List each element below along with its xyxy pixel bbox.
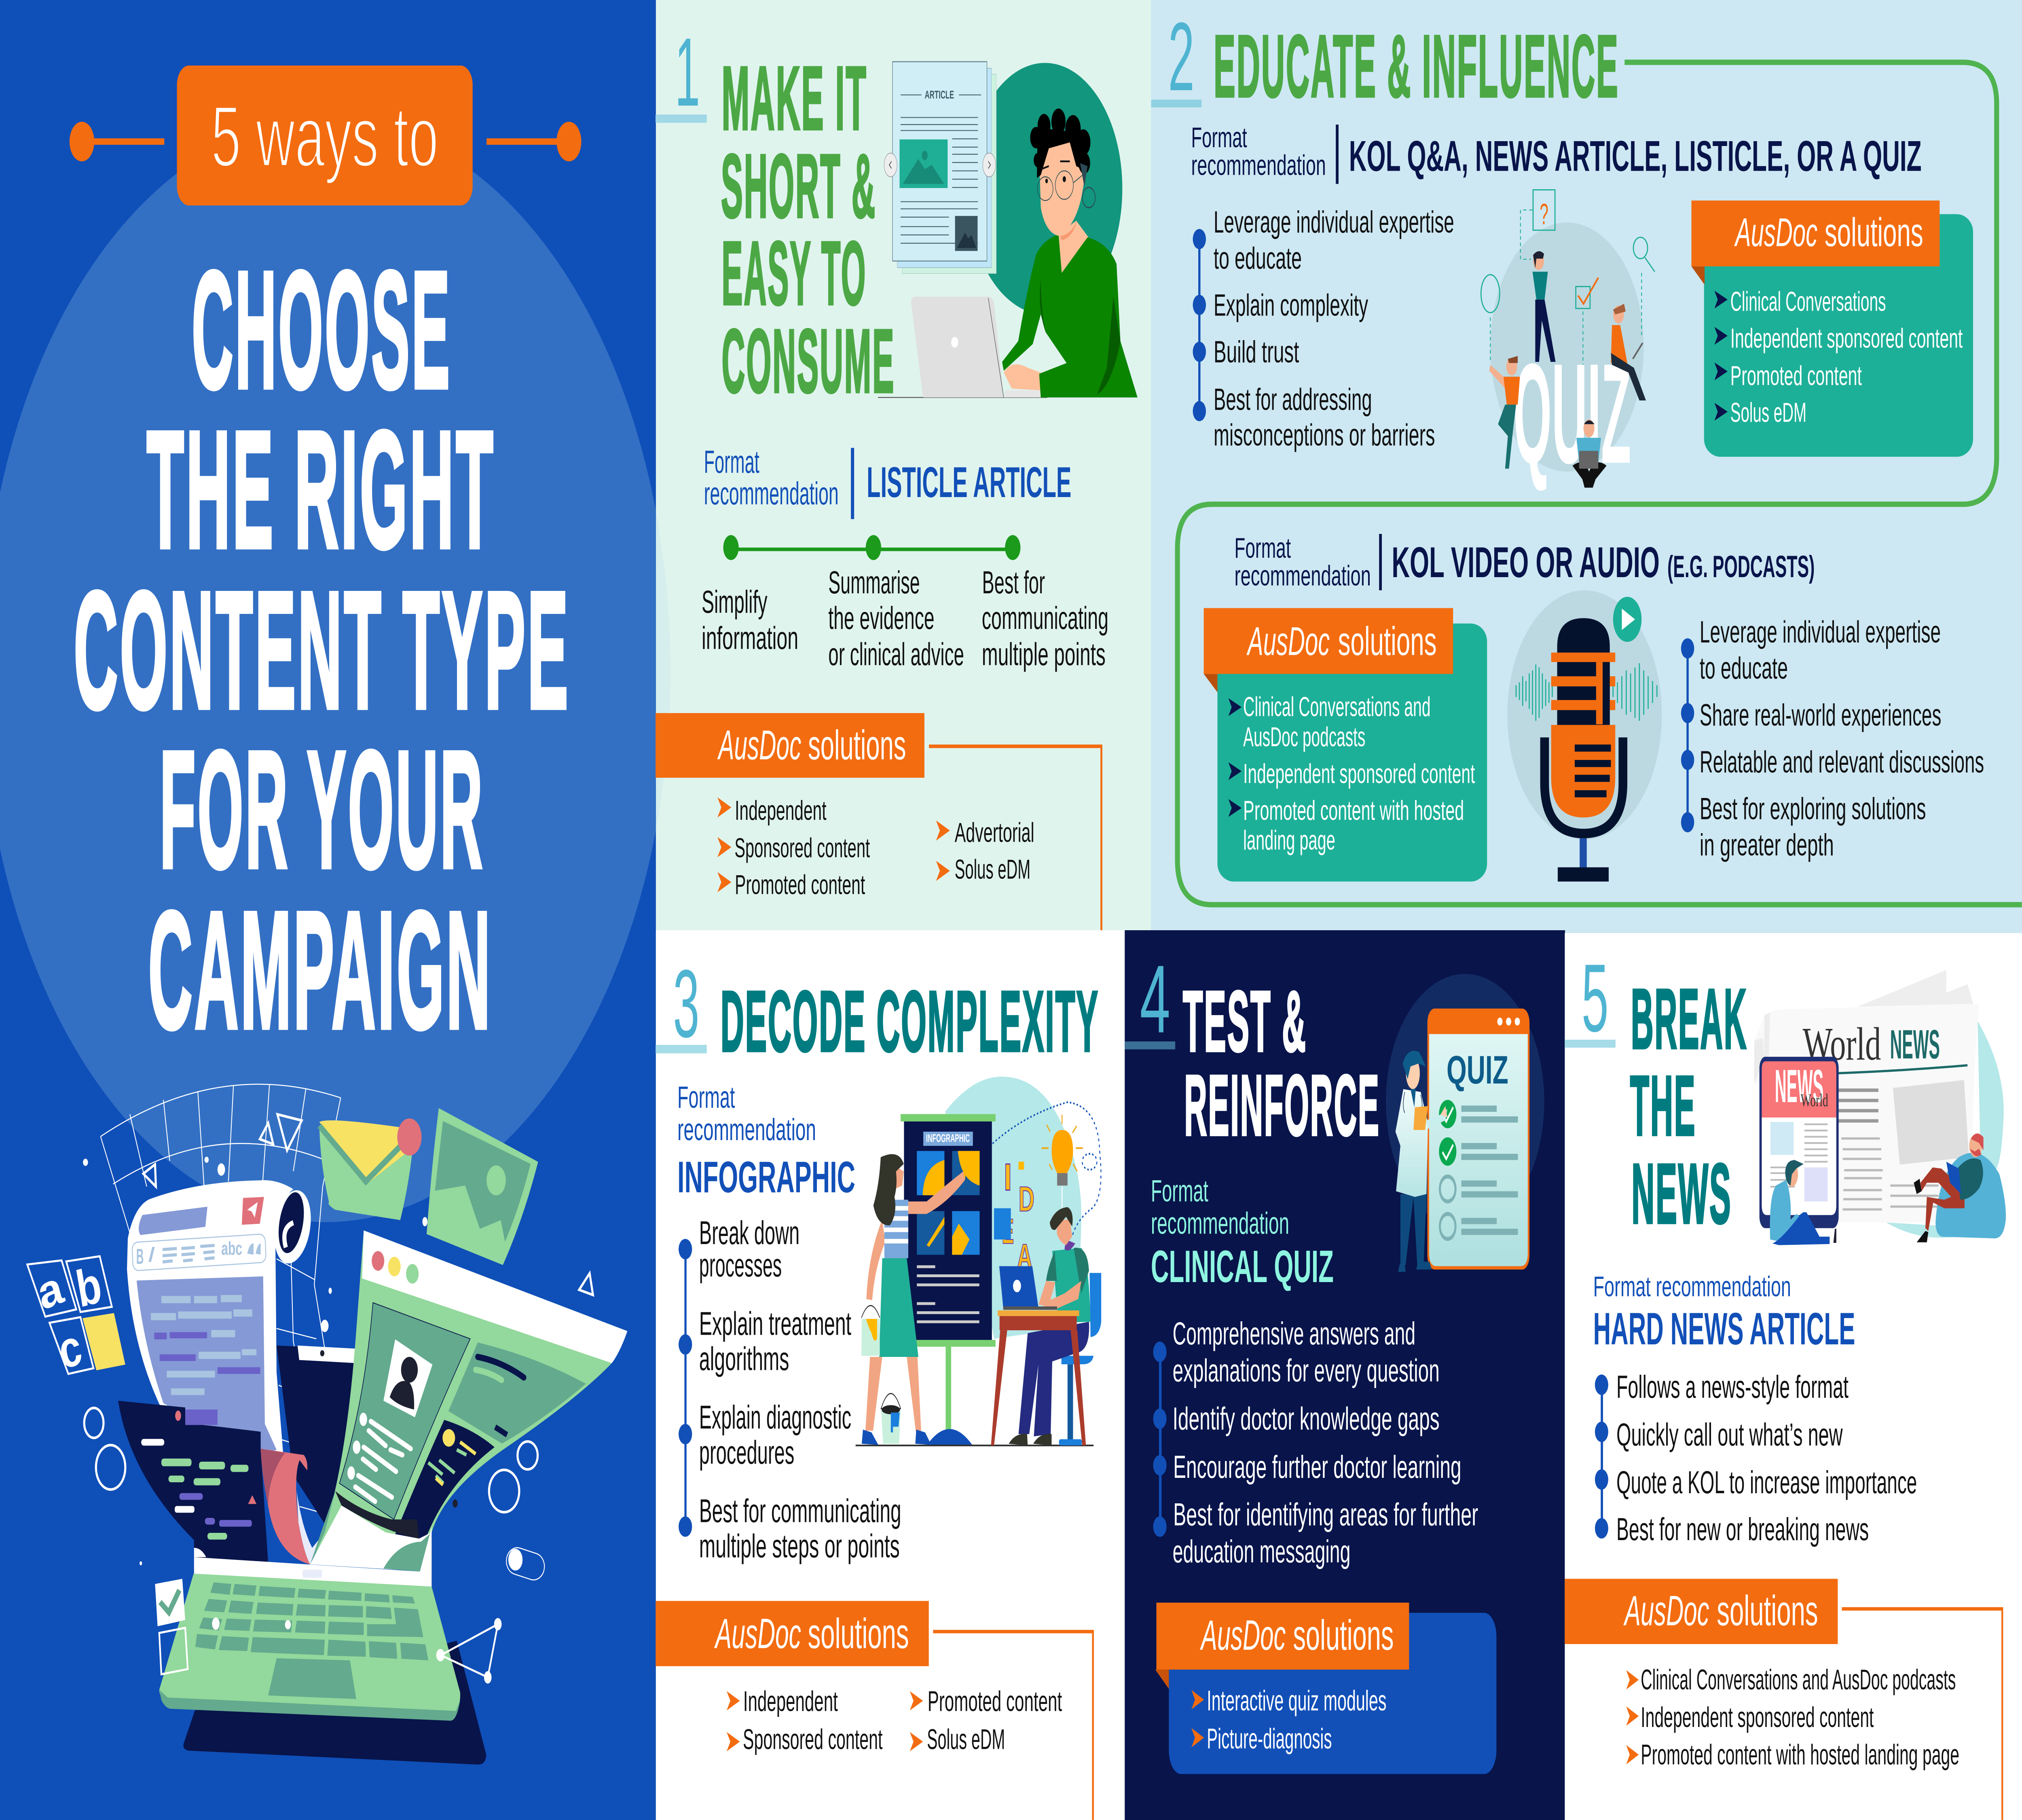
illustration: quiz people [1481,190,1655,493]
panel background: left title [0,0,656,1820]
heading [721,49,895,412]
illustration: newspaper and readers: NEWS [1890,1021,1940,1067]
solutions list: Solus eDM [927,1723,1005,1755]
timeline labels: Simplify [702,584,768,620]
format recommendation [704,444,839,511]
checkbox [155,1579,185,1626]
bullet text: Comprehensive answers and [1173,1316,1415,1352]
pill text: 5 ways to [211,88,438,185]
solutions box 2: AusDoc podcasts [1243,722,1365,752]
number rule [1565,1040,1616,1048]
shadow [183,1641,486,1765]
abc blocks [27,1256,112,1374]
panel: break the news [1565,945,2006,1820]
bullet text: Best for identifying areas for further [1173,1497,1478,1532]
solutions list: Independent sponsored content [1641,1701,1874,1733]
bullet text [1173,1316,1478,1570]
back screen [277,1346,355,1532]
bullet text: Explain diagnostic [699,1399,851,1435]
format recommendation: Format recommendation [1593,1271,1791,1302]
illustration: woman reading article [878,62,1138,398]
solutions list: Solus eDM [955,854,1030,885]
illustration: laptop with pages [27,1084,627,1765]
illustration: presenter and designer: A [1017,1238,1032,1275]
illustration: laptop with pages: c [54,1318,86,1380]
illustration: quiz people: ? [1540,197,1548,231]
bullets 1 [1193,229,1206,421]
desk laptop [999,1266,1038,1308]
format name: HARD NEWS ARTICLE [1593,1303,1855,1354]
panel background: test and reinforce [1125,930,1565,1820]
panel: left title [0,66,656,1222]
man sitting front [1770,1180,1801,1242]
bullet text 1: Explain complexity [1214,288,1368,322]
laptop [194,1527,431,1588]
solutions box: Interactive quiz modules [1207,1685,1386,1716]
panel background: educate and influence [1151,0,2022,933]
timeline labels [702,564,1108,672]
number 3: 3 [673,950,700,1058]
light bulb [1051,1130,1073,1173]
bullet text 2: in greater depth [1700,828,1834,862]
tablet [1760,1057,1839,1228]
red curl [261,1449,310,1564]
envelope [319,1127,413,1220]
illustration: newspaper and readers: NEWS [1775,1060,1823,1112]
solutions list: Sponsored content [734,833,870,863]
scroll body [137,1276,277,1455]
bullet text 1: Build trust [1214,335,1299,369]
format recommendation [1151,1174,1289,1240]
format name: CLINICAL QUIZ [1151,1241,1334,1292]
AusDoc header [1565,1579,1838,1644]
number rule [656,114,707,123]
illustration: newspaper and readers: World [1801,1090,1828,1110]
image card [427,1108,538,1265]
main title: THE RIGHT [146,396,495,583]
solutions box 1 [1692,201,1973,457]
toolbar [132,1234,266,1271]
illustration: presenter and designer: D [1019,1179,1034,1219]
man on beanbag [1935,1153,2006,1238]
bullet text: Quickly call out what’s new [1616,1418,1843,1453]
format recommendation: Format [704,444,759,480]
toggle [504,1545,547,1583]
format recommendation 2 [1235,532,1371,592]
format name 2: KOL VIDEO OR AUDIO [1392,538,1660,586]
bullet text: Explain treatment [699,1305,851,1342]
panel: decode complexity: AusDoc [714,1609,801,1657]
panel: make it short [656,18,1138,930]
main title: CONTENT TYPE [74,557,570,743]
format recommendation 2: recommendation [1235,560,1371,592]
format recommendation 1: recommendation [1191,150,1326,181]
solutions list [743,1685,1062,1755]
number 5: 5 [1582,945,1609,1052]
format name 2: (E.G. PODCASTS) [1667,550,1815,584]
bullet text [1616,1370,1917,1547]
bullet text: Encourage further doctor learning [1173,1450,1462,1485]
arrows [1626,1670,1639,1764]
AusDoc header [656,713,924,778]
bullet text: Best for communicating [699,1492,901,1529]
bullet text: Break down [699,1214,799,1251]
solutions list: Independent [735,795,827,826]
scroll title bar [139,1207,207,1235]
bullets [679,1239,692,1537]
woman [865,1357,921,1433]
circles and dots [84,1114,593,1512]
keyboard [195,1583,428,1699]
bullet text: procedures [699,1434,794,1471]
panel: test and reinforce [1125,946,1544,1774]
solutions box: AusDoc [1199,1611,1286,1659]
format recommendation: recommendation [704,475,839,511]
timeline labels: or clinical advice [828,636,964,672]
bullet text 1: to educate [1214,241,1302,275]
solutions box 1: solutions [1825,210,1923,255]
solutions box [1155,1603,1496,1774]
solutions box 2: Promoted content with hosted [1243,795,1464,826]
solutions box 2: Independent sponsored content [1243,758,1475,789]
panel: make it short: AusDoc [717,722,801,768]
bullet text: explanations for every question [1173,1353,1440,1388]
bullet text: Best for new or breaking news [1616,1512,1869,1547]
solutions box 1: Solus eDM [1730,397,1806,427]
number 1: 1 [675,18,700,127]
main title [74,237,570,1063]
browser window [310,1230,627,1571]
illustration: newspaper and readers: World [1803,1018,1881,1070]
number rule [1151,99,1201,107]
bullet text 2: to educate [1700,651,1788,686]
yellow block [82,1313,125,1370]
bullet text 1: misconceptions or barriers [1214,418,1435,452]
orange outline [933,1632,1093,1820]
divider [1336,125,1339,184]
solutions box 1: Clinical Conversations [1730,286,1886,317]
bullet text: Quote a KOL to increase importance [1616,1465,1917,1500]
illustration: laptop with pages: a [32,1261,68,1320]
number rule [656,1045,707,1053]
solutions list [734,795,1034,900]
solutions list: Promoted content with hosted landing page [1641,1739,1959,1771]
bullet text: algorithms [699,1340,789,1377]
format recommendation 2: Format [1235,532,1291,564]
illustration: doctor and quiz: QUIZ [1447,1047,1508,1092]
solutions list: Advertorial [955,817,1034,848]
main title: CHOOSE [192,237,452,423]
main title: FOR YOUR [160,716,484,903]
solutions box 1: Promoted content [1730,360,1862,391]
solutions box 2: Clinical Conversations and [1243,691,1431,722]
number 4: 4 [1140,946,1170,1053]
bullet text: Identify doctor knowledge gaps [1173,1401,1440,1437]
connector right [486,122,582,161]
code sheet [118,1401,268,1563]
panel: make it short: solutions [808,722,906,768]
AusDoc header [656,1601,929,1666]
panel background: decode complexity [656,930,1125,1820]
orange pill [177,66,473,205]
panel: decode complexity [656,950,1101,1820]
illustration: laptop with pages: B [136,1245,144,1269]
heading: NEWS [1631,1147,1732,1241]
dark card [394,1420,495,1545]
timeline labels: communicating [982,600,1108,636]
illustration: presenter and designer: INFOGRAPHIC [926,1132,970,1145]
timeline labels: Best for [982,564,1045,600]
heading: REINFORCE [1184,1057,1380,1153]
heading: SHORT & [721,136,876,237]
format recommendation: recommendation [1151,1206,1289,1240]
solutions list: Promoted content [928,1685,1062,1717]
timeline [723,535,1020,560]
heading: MAKE IT [721,49,867,149]
bullet text: multiple steps or points [699,1528,900,1564]
right card [448,1342,586,1443]
timeline labels: information [702,620,798,656]
solutions box 2 [1204,608,1487,882]
network triangle [441,1624,498,1677]
panel background: break the news [1565,933,2022,1820]
bullets [1153,1342,1167,1537]
illustration: laptop with pages: abc [221,1238,242,1259]
illustration: presenter and designer [856,1077,1101,1445]
panel: educate and influence: QUIZ [1513,334,1631,493]
illustration: laptop with pages: b [72,1255,106,1318]
solutions list [1641,1664,1959,1771]
format recommendation 1 [1191,122,1326,181]
solutions box: solutions [1293,1611,1394,1659]
heading [1183,973,1380,1153]
solutions box 2: landing page [1243,825,1335,855]
timeline labels: Summarise [828,564,920,600]
bucket [861,1319,880,1356]
divider 2 [1379,534,1382,590]
faint circle edge on panel 1 [655,505,670,836]
format name: INFOGRAPHIC [677,1152,855,1202]
timeline labels: multiple points [982,636,1106,672]
solutions list: Clinical Conversations and AusDoc podcasts [1641,1664,1956,1695]
arrows [727,1691,923,1751]
bullets 2 [1681,638,1694,832]
orange outline [1842,1609,2002,1820]
illustration: presenter and designer: E [1002,1212,1014,1251]
illustration: microphone [1507,590,1662,882]
solutions list: Promoted content [735,870,865,900]
bullet text 2 [1700,615,1984,862]
illustration: newspaper and readers [1754,970,2006,1245]
telegram icon [242,1197,264,1225]
heading: EASY TO [721,223,867,324]
panel: break the news: AusDoc [1623,1587,1709,1634]
heading: THE [1630,1059,1696,1153]
bullet text 1 [1214,205,1454,452]
scroll page [127,1180,293,1527]
format recommendation: Format [1151,1174,1208,1208]
format recommendation [677,1080,816,1147]
illustration: woman reading article: ARTICLE [925,89,954,101]
solutions list: Independent [743,1685,838,1717]
timeline labels: the evidence [828,600,935,636]
bullets [1595,1375,1608,1539]
scroll curl [269,1186,316,1268]
orange outline [929,746,1102,930]
man [1019,1322,1089,1436]
bullet text 1: Leverage individual expertise [1214,205,1454,239]
desk [998,1310,1079,1316]
bullet text [699,1214,901,1564]
heading: TEST & [1183,973,1307,1069]
number rule [1125,1041,1175,1050]
main title: CAMPAIGN [148,877,493,1063]
heading [1630,972,1747,1241]
panel background: make it short [655,0,1153,932]
chair [1089,1273,1101,1337]
divider [851,448,854,519]
panel: decode complexity: solutions [808,1609,909,1657]
illustration: doctor and quiz [1386,974,1544,1272]
format recommendation: recommendation [677,1113,816,1147]
panel: educate and influence [1151,2,2022,905]
white paper under cards [310,1505,431,1571]
bullet text: processes [699,1246,782,1283]
illustration: laptop with pages: I [148,1243,155,1267]
background circle [0,119,656,1222]
heading: CONSUME [721,311,895,412]
arrows [717,797,950,892]
panel: break the news: solutions [1717,1587,1818,1634]
format recommendation 1: Format [1191,122,1247,153]
bullet text: Follows a news-style format [1616,1370,1849,1405]
format name: LISTICLE ARTICLE [867,459,1071,507]
connector left [70,122,164,161]
bullet text: education messaging [1173,1534,1350,1570]
profile card [339,1303,470,1519]
solutions box: Picture-diagnosis [1207,1723,1332,1754]
grid lines [101,1084,341,1514]
heading: DECODE COMPLEXITY [721,973,1099,1070]
format recommendation: Format [677,1080,735,1114]
solutions box 2: solutions [1338,619,1436,664]
heading: BREAK [1631,972,1747,1067]
green outline [1178,62,2022,905]
solutions box 2: AusDoc [1246,619,1330,664]
number 2: 2 [1168,2,1195,111]
solutions box 1: AusDoc [1734,210,1817,255]
bullet text 1: Best for addressing [1214,382,1372,417]
solutions list: Sponsored content [743,1723,883,1755]
